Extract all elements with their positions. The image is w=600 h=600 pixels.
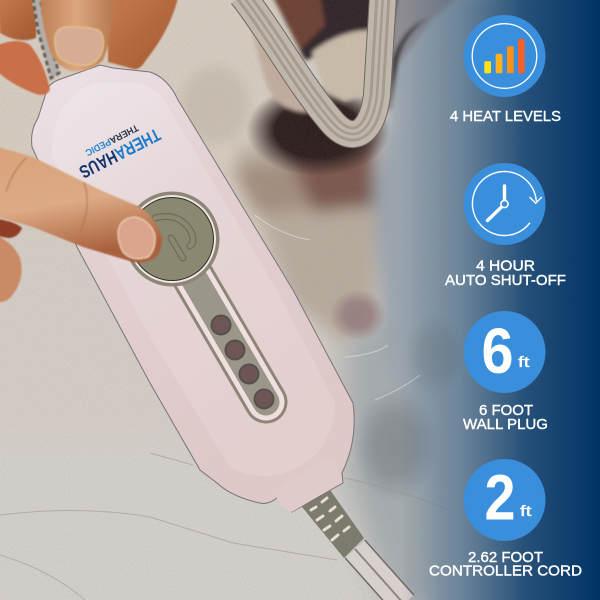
feature: 4 heat levels xyxy=(450,15,561,125)
controller plateau xyxy=(52,83,335,476)
hand: fingers holding the controller xyxy=(0,0,178,302)
label: 6 foot wall plug xyxy=(463,402,548,433)
label: 6 foot wall plug: 6 FOOT xyxy=(479,402,533,419)
label: 4 hour auto shut-off xyxy=(445,258,566,289)
icon: 2 ft: ft xyxy=(520,503,533,520)
label: 4 hour auto shut-off: AUTO SHUT-OFF xyxy=(445,272,566,289)
icon: 6 ft: 6 xyxy=(482,315,514,387)
label: 6 foot wall plug: WALL PLUG xyxy=(463,416,548,433)
label: 4 hour auto shut-off: 4 HOUR xyxy=(476,258,535,275)
controller body xyxy=(32,65,354,512)
power button xyxy=(124,192,220,286)
pointing index finger xyxy=(0,147,162,262)
finger: lower left xyxy=(0,219,22,238)
right blue gradient overlay xyxy=(400,0,600,600)
label: 4 heat levels: 4 HEAT LEVELS xyxy=(450,108,561,125)
finger: right top xyxy=(108,0,178,69)
strain relief and lower cord xyxy=(302,487,404,600)
LED indicators xyxy=(212,316,274,408)
finger: top left xyxy=(0,0,36,40)
thumb with nail xyxy=(40,0,113,71)
label: 2.62 foot controller cord xyxy=(429,549,582,580)
icon: clock xyxy=(464,163,546,245)
label: 2.62 foot controller cord: 2.62 FOOT xyxy=(468,549,543,566)
label: 2.62 foot controller cord: CONTROLLER CORD xyxy=(429,562,582,580)
feature: 2.62 foot controller cord xyxy=(429,459,582,580)
icon: 2 ft: 2 xyxy=(484,462,516,534)
icon: 6 ft: ft xyxy=(518,354,531,371)
blanket creases xyxy=(0,453,450,600)
LED slot xyxy=(182,258,266,402)
brand logo: THERAHAUS xyxy=(76,124,164,182)
cord ribbon at top xyxy=(242,0,383,134)
icon: 2 ft xyxy=(464,459,546,541)
cord cap xyxy=(277,458,342,512)
brand logo: THERAPEDIC xyxy=(83,122,140,158)
icon: 6 ft xyxy=(464,311,546,393)
finger: bottom left xyxy=(0,236,22,302)
feature: 6 foot wall plug xyxy=(463,311,548,433)
finger: left pinch xyxy=(0,41,50,95)
feature: auto shut-off xyxy=(445,163,566,289)
cord grip at controller top xyxy=(33,0,59,78)
controller xyxy=(32,65,354,512)
icon: heat level bars xyxy=(464,15,546,97)
